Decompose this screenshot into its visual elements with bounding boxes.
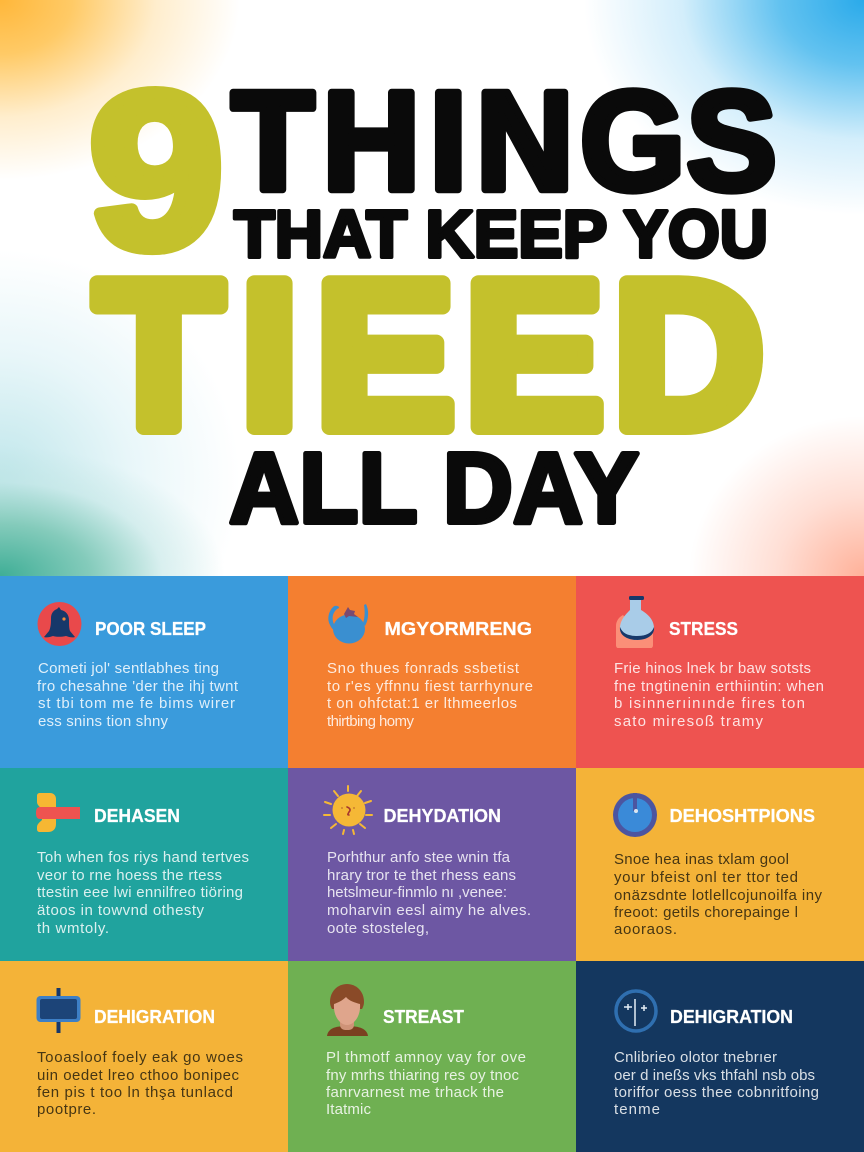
heading: DEHIGRATION bbox=[94, 1006, 215, 1027]
body text: b isinnerıinınde fires ton bbox=[614, 695, 805, 712]
body text: veor to rne hoess the rtess bbox=[37, 867, 222, 884]
body text: Toh when fos riys hand tertves bbox=[37, 849, 249, 866]
hero background gradient bbox=[0, 0, 864, 576]
panel: poor sleep bbox=[0, 576, 288, 768]
panel: stress bbox=[576, 576, 864, 768]
body text bbox=[327, 849, 531, 937]
body text: fne tngtinenin erthiintin: when bbox=[614, 678, 824, 695]
heading: DEHYDATION bbox=[384, 805, 501, 826]
body text: fen pis t too ln thşa tunlacd bbox=[37, 1084, 233, 1101]
panel: dehydation bbox=[288, 768, 576, 962]
body text: Snoe hea inas txlam gool bbox=[614, 851, 789, 868]
body text bbox=[614, 1049, 819, 1118]
body text: ätoos in towvnd othesty bbox=[37, 902, 204, 919]
heading: STRESS bbox=[669, 618, 738, 639]
body text: t on ohfctat:1 er lthmeerlos bbox=[327, 695, 517, 712]
icon: monitor sign bbox=[36, 988, 80, 1033]
body text: your bfeist onl ter ttor ted bbox=[614, 869, 798, 886]
body text: aooraos. bbox=[614, 921, 677, 938]
body text: tenme bbox=[614, 1101, 660, 1118]
body text bbox=[614, 660, 824, 730]
panel: dehoshtpions bbox=[576, 768, 864, 962]
panel: dehasen bbox=[0, 768, 288, 962]
body text: pootpre. bbox=[37, 1101, 96, 1118]
title bbox=[89, 47, 777, 544]
heading: STREAST bbox=[383, 1006, 465, 1027]
body text: onäzsdnte lotlellcojunoilfa iny bbox=[614, 887, 822, 904]
body text: Cometi jol' sentlabhes ting bbox=[38, 660, 219, 677]
body text: Itatmic bbox=[326, 1101, 372, 1118]
panel: dehigration navy bbox=[576, 961, 864, 1152]
heading: ALL DAY: ALL DAY bbox=[229, 432, 639, 544]
body text: Cnlibrieo olotor tnebrıer bbox=[614, 1049, 777, 1066]
body text: uin oedet lreo cthoo bonipec bbox=[37, 1067, 240, 1084]
icon: person bbox=[327, 984, 368, 1036]
panel: mgyormreng bbox=[288, 576, 576, 768]
body text: fny mrhs thiaring res oy tnoc bbox=[326, 1067, 520, 1084]
body text: fro chesahne 'der the ihj twnt bbox=[37, 678, 239, 695]
body text bbox=[37, 849, 249, 937]
body text: sato miresoß tramy bbox=[614, 713, 764, 730]
body text: Porhthur anfo stee wnin tfa bbox=[327, 849, 511, 866]
body text: Tooasloof foely eak go woes bbox=[37, 1049, 243, 1066]
body text: hetslmeur-finmlo nı ,venee: bbox=[327, 884, 507, 901]
heading: THAT KEEP YOU: THAT KEEP YOU bbox=[234, 197, 768, 272]
heading: DEHOSHTPIONS bbox=[670, 805, 815, 826]
icon: bracket and bar bbox=[36, 793, 80, 832]
body text: to r'es yffnnu fiest tarrhynure bbox=[327, 678, 533, 695]
body text bbox=[326, 1049, 526, 1118]
body text bbox=[37, 1049, 243, 1118]
icon: gauge bbox=[613, 793, 657, 837]
body text: ttestin eee lwi ennilfreo tiöring bbox=[37, 884, 243, 901]
body text bbox=[327, 660, 533, 730]
body text: st tbi tom me fe bims wirer bbox=[38, 695, 235, 712]
body text: Frie hinos lnek br baw sotsts bbox=[614, 660, 811, 677]
body text: Sno thues fonrads ssbetist bbox=[327, 660, 520, 677]
icon: sun bbox=[324, 786, 372, 834]
icon: ring with antenna bbox=[616, 991, 656, 1031]
body text: ess snins tion shny bbox=[38, 713, 168, 730]
body text: thirtbing homy bbox=[327, 713, 414, 730]
heading: MGYORMRENG bbox=[384, 618, 532, 639]
body text: hrary tror te thet rhess eans bbox=[327, 867, 516, 884]
heading: DEHIGRATION bbox=[670, 1006, 793, 1027]
icon: flask bbox=[616, 596, 654, 648]
numeral 9: 9 bbox=[89, 47, 224, 295]
body text: freoot: getils chorepainge l bbox=[614, 904, 798, 921]
body text: moharvin eesl aimy he alves. bbox=[327, 902, 531, 919]
body text: th wmtoly. bbox=[37, 920, 109, 937]
icon: sleeping figure bbox=[38, 602, 82, 646]
icon: blue pot bbox=[328, 604, 368, 644]
body text bbox=[37, 660, 239, 730]
body text: fanrvarnest me trhack the bbox=[326, 1084, 504, 1101]
body text: toriffor oess thee cobnritfoing bbox=[614, 1084, 819, 1101]
heading: POOR SLEEP bbox=[95, 618, 206, 639]
body text: oer d ineßs vks thfahl nsb obs bbox=[614, 1067, 815, 1084]
heading: TIEED: TIEED bbox=[95, 239, 764, 472]
heading: THINGS: THINGS bbox=[232, 63, 777, 220]
body text bbox=[614, 851, 822, 938]
heading: DEHASEN bbox=[94, 805, 180, 826]
panel: dehigration yellow bbox=[0, 961, 288, 1152]
body text: oote stosteleg, bbox=[327, 920, 429, 937]
body text: Pl thmotf amnoy vay for ove bbox=[326, 1049, 526, 1066]
panel: streast bbox=[288, 961, 576, 1152]
